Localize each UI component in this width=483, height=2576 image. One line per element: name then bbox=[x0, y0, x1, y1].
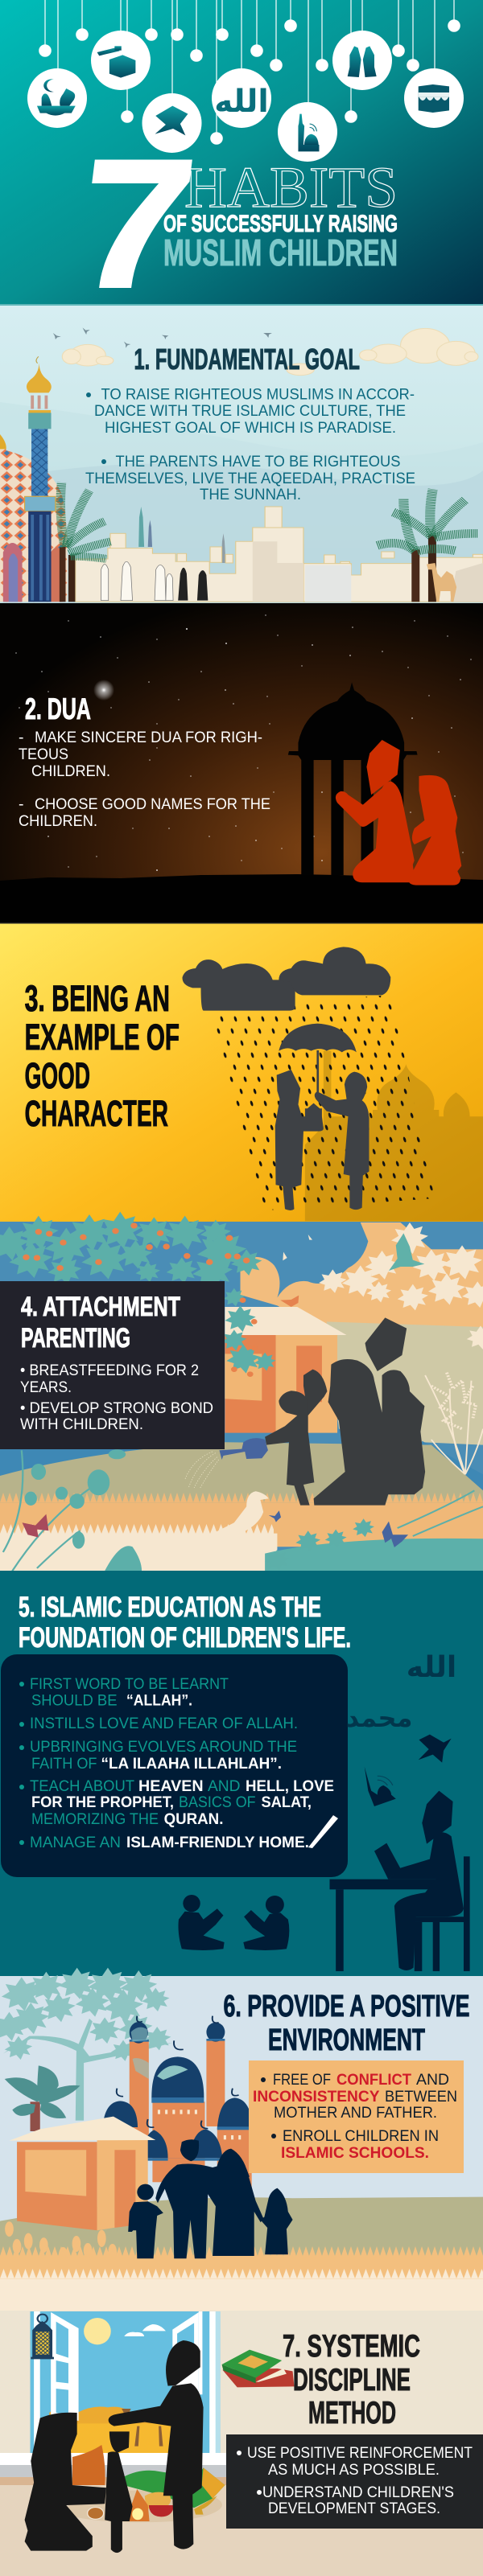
title numeral 7: 7 bbox=[68, 121, 204, 325]
heading: 2. DUA bbox=[25, 692, 91, 725]
text block bbox=[20, 1362, 213, 1433]
text block: goals: TO RAISE RIGHTEOUS MUSLIMS IN ACCOR- bbox=[101, 386, 415, 404]
text block: INCONSISTENCY bbox=[253, 2088, 380, 2106]
scenery: house bbox=[9, 2117, 155, 2230]
icon: food tray and crescent bbox=[37, 79, 76, 116]
text block: goals: THEMSELVES, LIVE THE AQEEDAH, PRACTISE bbox=[85, 470, 415, 487]
text block: points: UPBRINGING EVOLVES AROUND THE bbox=[30, 1738, 297, 1756]
text block bbox=[237, 2444, 473, 2517]
scenery: mosque bbox=[102, 2016, 253, 2196]
illustration: family silhouette watering bbox=[265, 1317, 425, 1506]
scenery: clouds bbox=[62, 328, 478, 376]
illustration: watering can bbox=[185, 1438, 268, 1488]
text block: points: QURAN. bbox=[164, 1810, 223, 1828]
heading bbox=[283, 2329, 420, 2430]
heading: PARENTING bbox=[21, 1323, 130, 1354]
text block: dua bbox=[19, 729, 270, 830]
text block: BETWEEN bbox=[385, 2088, 457, 2106]
text block: points: MEMORIZING THE bbox=[31, 1810, 159, 1828]
text panel bbox=[1, 1654, 348, 1877]
text block: points: MANAGE AN bbox=[30, 1834, 121, 1851]
scenery: fruit tree foliage bbox=[0, 1212, 262, 1288]
title: HABITS: HABITS bbox=[184, 155, 398, 220]
scenery: stars bbox=[15, 614, 472, 871]
scenery: dove bbox=[204, 1491, 269, 1538]
icon: Kaaba bbox=[419, 84, 449, 113]
scenery: tree over house bbox=[222, 1288, 276, 1377]
illustration: two figures with gift bbox=[275, 1070, 369, 1210]
text block: • DEVELOP STRONG BOND bbox=[20, 1399, 213, 1417]
panel: header bbox=[0, 0, 483, 325]
icon: Allah calligraphy: الله bbox=[214, 84, 269, 120]
icon: lantern bbox=[31, 2315, 54, 2359]
scenery: bright star bbox=[93, 680, 114, 700]
figure: two children reading bbox=[178, 1895, 289, 1950]
illustration: rain bbox=[209, 995, 435, 1210]
text block: points: HEAVEN bbox=[138, 1777, 204, 1795]
scenery: wheat bbox=[5, 2221, 117, 2262]
heading bbox=[224, 1990, 470, 2057]
text block: dua: CHOOSE GOOD NAMES FOR THE bbox=[35, 795, 270, 813]
text block: points: “ALLAH”. bbox=[126, 1692, 192, 1710]
scenery: palm left bbox=[60, 483, 111, 602]
icon: praying hands bbox=[348, 46, 377, 77]
heading bbox=[19, 1592, 351, 1654]
text block: • BREASTFEEDING FOR 2 bbox=[20, 1362, 199, 1379]
heading: METHOD bbox=[308, 2396, 396, 2430]
scenery: mosque silhouette bbox=[305, 1051, 483, 1221]
text block: points: TEACH ABOUT bbox=[30, 1777, 134, 1795]
illustration: clouds bbox=[183, 947, 390, 1011]
text block: points: AND bbox=[208, 1777, 240, 1795]
text block: DEVELOPMENT STAGES. bbox=[268, 2500, 440, 2517]
heading: CHARACTER bbox=[25, 1093, 168, 1134]
text panel bbox=[0, 1281, 225, 1449]
text block: goals: DANCE WITH TRUE ISLAMIC CULTURE, THE bbox=[94, 402, 406, 420]
scenery: gazebo bbox=[288, 682, 418, 875]
illustration: umbrella bbox=[279, 1024, 357, 1095]
scenery: cream leaves bbox=[319, 1222, 483, 1350]
scenery: ground bbox=[0, 874, 483, 922]
text block: AND bbox=[416, 2071, 449, 2089]
icon: Muhammad calligraphy: محمد bbox=[346, 1703, 412, 1733]
text block: points: SHOULD BE bbox=[31, 1692, 118, 1710]
heading: GOOD bbox=[25, 1055, 90, 1096]
scenery: palms right bbox=[378, 489, 477, 602]
scenery: pillow, rug, food bbox=[64, 2445, 225, 2522]
scenery: orange fruit bbox=[23, 1222, 250, 1271]
text block: points: SALAT, bbox=[261, 1793, 312, 1811]
text block: ENROLL CHILDREN IN bbox=[283, 2127, 439, 2145]
text block: points: FOR THE PROPHET, bbox=[31, 1793, 174, 1811]
scenery: grass edge cream bbox=[0, 2269, 483, 2278]
panel: 1 fundamental goal bbox=[0, 306, 483, 603]
text block: dua: TEOUS bbox=[19, 746, 68, 763]
panel: 4 attachment parenting bbox=[0, 1212, 483, 1571]
panel: 3 being an example bbox=[0, 922, 483, 1222]
text block: dua: CHILDREN. bbox=[19, 812, 97, 830]
scenery: bird bbox=[389, 1233, 424, 1271]
text block: YEARS. bbox=[20, 1378, 72, 1396]
text block: points bbox=[19, 1675, 334, 1851]
scenery: people bbox=[101, 561, 208, 601]
text block: UNDERSTAND CHILDREN'S bbox=[262, 2484, 454, 2501]
icon: mosque with adhan bbox=[298, 114, 319, 151]
heading: 3. BEING AN bbox=[25, 978, 170, 1019]
text block: points: BASICS OF bbox=[179, 1793, 256, 1811]
scenery: foreground plants bbox=[3, 1449, 483, 1571]
text block: MOTHER AND FATHER. bbox=[274, 2104, 437, 2122]
heading: 1. FUNDAMENTAL GOAL bbox=[134, 343, 360, 376]
scenery: garden layers bbox=[0, 1222, 483, 1571]
text block: CONFLICT bbox=[336, 2071, 411, 2089]
scenery: grass edge cream bbox=[0, 1524, 274, 1534]
text block: points: “LA ILAAHA ILLAHLAH”. bbox=[101, 1755, 282, 1773]
scenery: minaret bbox=[25, 356, 56, 602]
text block: WITH CHILDREN. bbox=[20, 1415, 143, 1433]
text block: goals: THE SUNNAH. bbox=[200, 486, 301, 503]
icon: gift box bbox=[97, 46, 135, 78]
heading: 5. ISLAMIC EDUCATION AS THE bbox=[19, 1592, 321, 1623]
text block: points: INSTILLS LOVE AND FEAR OF ALLAH. bbox=[30, 1715, 298, 1732]
scenery: patterned dome bbox=[0, 434, 68, 602]
heading: 7. SYSTEMIC bbox=[283, 2329, 420, 2364]
icon discs bbox=[27, 31, 464, 162]
hanging strings and beads bbox=[39, 0, 460, 144]
scenery: tree bbox=[0, 1968, 172, 2121]
figures: parents and child bbox=[25, 2340, 204, 2553]
scenery: birds bbox=[53, 327, 272, 348]
scenery: grass edge peach bbox=[0, 2246, 483, 2256]
heading: 4. ATTACHMENT bbox=[21, 1292, 180, 1322]
text block: dua: - bbox=[19, 795, 24, 813]
figure: mother and child praying bbox=[336, 740, 461, 885]
text panel bbox=[226, 2434, 483, 2529]
scenery: grass edge peach bbox=[0, 1493, 483, 1502]
scenery: house bbox=[225, 1235, 347, 1433]
scenery: window bbox=[0, 2311, 226, 2477]
scenery: camel bbox=[427, 563, 456, 602]
heading: DISCIPLINE bbox=[293, 2363, 411, 2397]
scenery: small palm bbox=[5, 2065, 80, 2131]
scenery: skyline bbox=[76, 507, 483, 602]
panel: 5 Islamic education bbox=[0, 1571, 483, 1976]
heading bbox=[21, 1292, 180, 1354]
scenery: flowering shrub bbox=[425, 1373, 483, 1474]
heading: EXAMPLE OF bbox=[25, 1017, 180, 1058]
panel: 6 positive environment bbox=[0, 1968, 483, 2314]
text block: goals: HIGHEST GOAL OF WHICH IS PARADISE. bbox=[105, 419, 396, 437]
text block: dua: MAKE SINCERE DUA FOR RIGH- bbox=[35, 729, 262, 746]
text block: goals bbox=[85, 386, 415, 503]
heading bbox=[25, 978, 180, 1134]
icon: Allah calligraphy: الله bbox=[407, 1651, 456, 1684]
text block: points: FAITH OF bbox=[31, 1755, 97, 1773]
scenery: ground layers bbox=[0, 2197, 483, 2308]
icon: pencil bbox=[308, 1815, 338, 1848]
icon: Quran stand bbox=[155, 106, 188, 135]
text block bbox=[253, 2071, 457, 2162]
panel: 7 systemic discipline bbox=[0, 2311, 483, 2576]
text block: dua: - bbox=[19, 729, 24, 746]
text block: points: FIRST WORD TO BE LEARNT bbox=[30, 1675, 229, 1693]
text panel bbox=[249, 2060, 464, 2173]
icon: Quran stand bbox=[419, 1735, 452, 1763]
text block: dua: CHILDREN. bbox=[31, 762, 110, 780]
scenery: butterflies bbox=[23, 1510, 408, 1547]
icon: mosque bbox=[365, 1767, 396, 1806]
text block: ISLAMIC SCHOOLS. bbox=[281, 2144, 429, 2162]
text block: goals: THE PARENTS HAVE TO BE RIGHTEOUS bbox=[116, 453, 401, 470]
icon: books bbox=[222, 2350, 294, 2387]
text block: AS MUCH AS POSSIBLE. bbox=[268, 2461, 440, 2479]
figure: family from behind bbox=[128, 2139, 293, 2258]
text block: points: HELL, LOVE bbox=[246, 1777, 334, 1795]
text block: FREE OF bbox=[273, 2071, 331, 2089]
figure: teacher at desk bbox=[329, 1791, 470, 1971]
text block: points: ISLAM-FRIENDLY HOME. bbox=[126, 1834, 309, 1851]
panel: 2 dua bbox=[0, 603, 483, 922]
